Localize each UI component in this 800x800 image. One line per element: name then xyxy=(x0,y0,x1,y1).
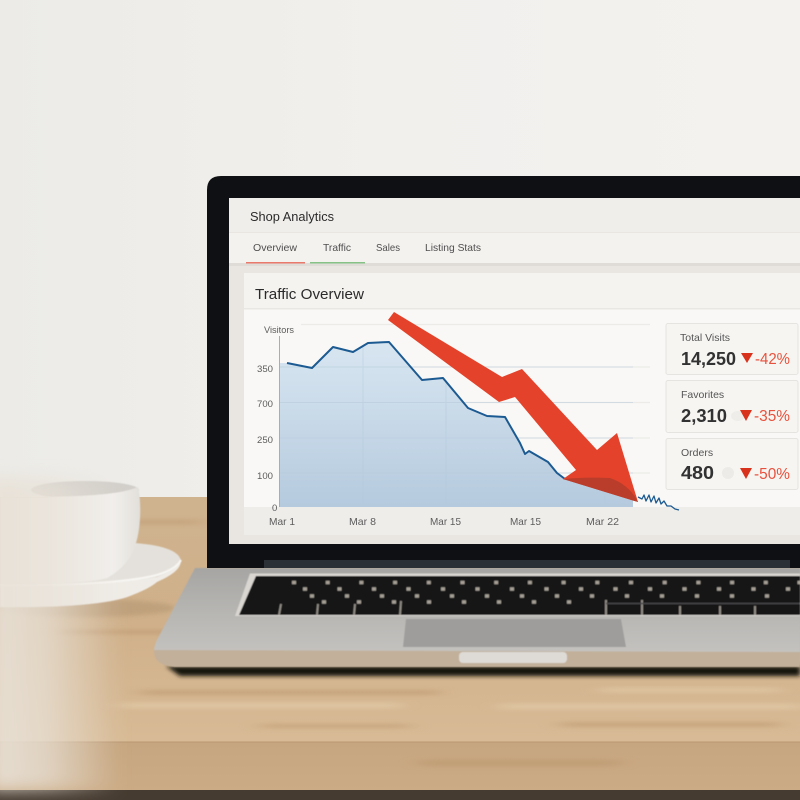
y axis labels: 700 xyxy=(257,399,273,410)
trackpad xyxy=(403,619,626,647)
app header: Shop Analytics xyxy=(250,209,334,224)
hinge xyxy=(264,560,790,568)
app header xyxy=(229,198,800,232)
visitors line xyxy=(287,342,565,479)
tab bar: Listing Stats xyxy=(425,242,481,254)
panel title: Traffic Overview xyxy=(255,287,365,303)
y axis labels: 100 xyxy=(257,471,273,482)
y axis labels: Visitors xyxy=(264,325,294,336)
tab bar: Traffic xyxy=(323,242,351,254)
stat card: favorites: -35% xyxy=(754,408,790,425)
stat card: total visits: 14,250 xyxy=(681,348,736,369)
stat card: total visits: -42% xyxy=(755,351,790,368)
bottom axis strip xyxy=(244,507,800,535)
front lip xyxy=(154,650,800,667)
front notch xyxy=(459,652,567,663)
wiggly tail xyxy=(638,495,679,510)
x axis labels xyxy=(269,516,619,528)
deck surface xyxy=(154,568,800,652)
area fill xyxy=(280,342,633,507)
x axis labels: Mar 1 xyxy=(269,516,295,528)
x axis labels: Mar 15 xyxy=(510,516,541,528)
tab bar: Sales xyxy=(376,242,400,254)
arrow: red downward trend xyxy=(388,312,638,502)
x axis labels: Mar 8 xyxy=(349,516,376,528)
y axis labels: 350 xyxy=(257,364,273,375)
laptop base xyxy=(154,568,800,667)
stat card: favorites: Favorites xyxy=(681,389,724,401)
stat card: favorites: 2,310 xyxy=(681,405,727,426)
panel: traffic overview xyxy=(244,273,800,535)
y axis labels: 0 xyxy=(272,503,277,514)
wooden desk xyxy=(0,497,800,800)
panel title xyxy=(244,273,800,310)
stat card: total visits: Total Visits xyxy=(680,332,730,344)
stat card: orders: 480 xyxy=(681,462,714,483)
line chart xyxy=(257,324,679,528)
left soft focus haze xyxy=(0,478,120,790)
y axis xyxy=(278,336,280,507)
tab bar xyxy=(229,233,800,266)
x axis labels: Mar 15 xyxy=(430,516,461,528)
stat card: orders xyxy=(666,438,798,490)
coffee cup and saucer xyxy=(0,481,181,617)
stat card: orders: -50% xyxy=(754,466,790,483)
tab bar: Overview xyxy=(253,242,297,254)
laptop shadow xyxy=(166,666,800,676)
y axis labels xyxy=(257,325,294,514)
laptop lid xyxy=(207,176,800,568)
y axis labels: 250 xyxy=(257,435,273,446)
stat card: total visits xyxy=(666,324,798,374)
wall background xyxy=(0,0,800,498)
screen xyxy=(229,198,800,544)
x axis labels: Mar 22 xyxy=(586,516,619,528)
stat card: orders: Orders xyxy=(681,447,713,459)
keyboard xyxy=(235,574,800,616)
stat card: favorites xyxy=(666,380,798,432)
